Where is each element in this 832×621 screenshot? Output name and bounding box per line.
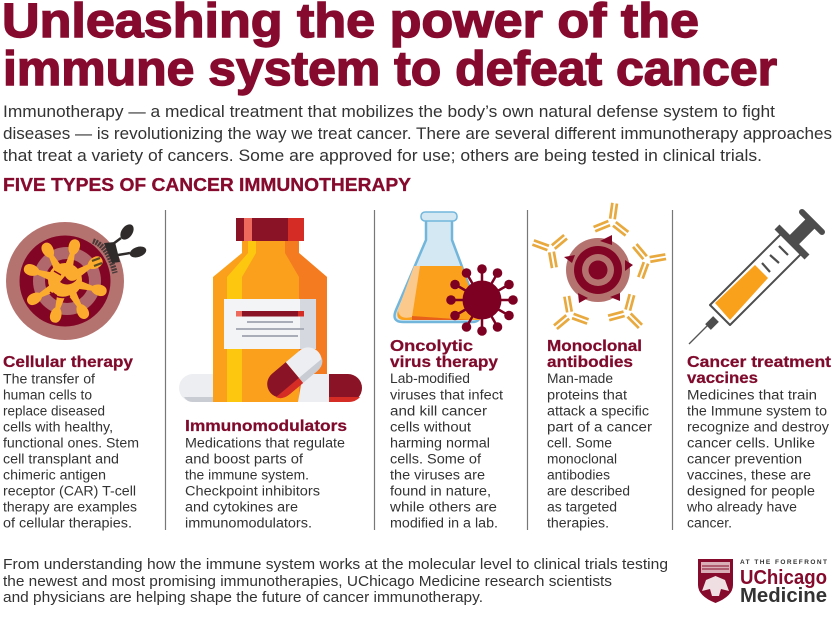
icon: pill bottle and capsules <box>179 218 362 403</box>
text: cellular therapy: therapy are examples <box>3 500 137 514</box>
text: oncolytic virus therapy: Lab-modified <box>390 371 470 386</box>
text: cellular therapy: receptor (CAR) T-cell <box>3 484 136 498</box>
heading: oncolytic virus therapy <box>390 338 498 371</box>
text: cellular therapy: replace diseased <box>3 404 105 418</box>
text: oncolytic virus therapy: while others are <box>389 500 497 514</box>
text: cancer treatment vaccines: recognize and destroy <box>687 420 829 434</box>
text: monoclonal antibodies: proteins that <box>547 388 627 402</box>
text: cancer treatment vaccines: designed for people <box>687 484 815 498</box>
text: oncolytic virus therapy: modified in a lab. <box>390 516 498 530</box>
text: cancer treatment vaccines: Medicines that train <box>687 388 817 402</box>
heading: monoclonal antibodies: antibodies <box>547 354 633 371</box>
logo: UChicago Medicine: AT THE FOREFRONT <box>740 559 827 566</box>
text: oncolytic virus therapy: found in nature, <box>390 484 491 498</box>
panel: immunomodulators <box>179 218 362 530</box>
text: monoclonal antibodies: therapies. <box>547 516 609 530</box>
text: cellular therapy: human cells to <box>3 388 92 402</box>
text: monoclonal antibodies: part of a cancer <box>547 420 653 434</box>
heading: monoclonal antibodies <box>547 338 642 371</box>
panel: cancer treatment vaccines <box>686 212 832 530</box>
title <box>2 0 777 96</box>
footer text: and physicians are helping shape the future of cancer immunotherapy. <box>3 589 483 606</box>
heading: oncolytic virus therapy: Oncolytic <box>390 338 473 355</box>
text: monoclonal antibodies: Man-made <box>547 371 613 386</box>
footer text <box>3 556 668 606</box>
text: monoclonal antibodies <box>547 371 653 530</box>
heading: monoclonal antibodies: Monoclonal <box>547 338 642 355</box>
logo: UChicago Medicine: Medicine <box>740 585 827 607</box>
section heading: FIVE TYPES OF CANCER IMMUNOTHERAPY <box>3 175 411 195</box>
panel: oncolytic virus therapy <box>389 212 518 530</box>
text: cellular therapy: functional ones. Stem <box>3 436 139 450</box>
heading: cancer treatment vaccines <box>687 354 832 387</box>
text: cellular therapy: cell transplant and <box>3 452 119 466</box>
footer text: From understanding how the immune system works at the molecular level to clinical trials testing <box>3 556 668 573</box>
intro paragraph <box>3 103 832 165</box>
icon: T-cell attacking cancer cell <box>6 222 148 340</box>
heading: cancer treatment vaccines: Cancer treatment <box>687 354 832 371</box>
text: oncolytic virus therapy: viruses that infect <box>390 388 503 402</box>
panel: monoclonal antibodies <box>532 201 669 530</box>
text: immunomodulators: immunomodulators. <box>185 516 312 530</box>
text: immunomodulators: and boost parts of <box>185 452 303 466</box>
icon: antibodies around target cell <box>532 201 669 329</box>
text: immunomodulators: Checkpoint inhibitors <box>185 484 320 498</box>
text: monoclonal antibodies: as targeted <box>547 500 617 514</box>
icon: flask with virus <box>395 212 518 336</box>
text: cancer treatment vaccines: cancer. <box>687 516 732 530</box>
text: cancer treatment vaccines: who already have <box>686 500 797 514</box>
text: cancer treatment vaccines: the Immune system to <box>687 404 827 418</box>
text: oncolytic virus therapy: and kill cancer <box>390 404 488 418</box>
text: cellular therapy: of cellular therapies. <box>3 516 132 530</box>
text: oncolytic virus therapy: the viruses are <box>390 468 485 482</box>
icon: virus <box>446 264 518 336</box>
text: cellular therapy: chimeric antigen <box>3 468 106 482</box>
heading: cancer treatment vaccines: vaccines <box>687 370 758 387</box>
text: cellular therapy: cells with healthy, <box>3 420 113 434</box>
text: cancer treatment vaccines: vaccines, these are <box>687 468 811 482</box>
text: cancer treatment vaccines: cancer prevention <box>687 452 802 466</box>
text: cancer treatment vaccines <box>686 388 829 530</box>
intro paragraph: Immunotherapy — a medical treatment that mobilizes the body’s own natural defense system to fight <box>3 103 775 121</box>
intro paragraph: that treat a variety of cancers. Some are approved for use; others are being tested in clinical trials. <box>3 147 762 165</box>
text: oncolytic virus therapy <box>389 371 503 530</box>
logo: UChicago Medicine <box>698 559 827 607</box>
intro paragraph: diseases — is revolutionizing the way we treat cancer. There are several different immunotherapy approaches <box>3 125 832 143</box>
text: oncolytic virus therapy: harming normal <box>390 436 490 450</box>
text: monoclonal antibodies: cell. Some <box>547 436 612 450</box>
text: immunomodulators: and cytokines are <box>185 500 298 514</box>
text: monoclonal antibodies: are described <box>547 484 630 498</box>
logo: UChicago Medicine: UChicago <box>740 567 827 589</box>
text: cellular therapy: The transfer of <box>3 372 95 386</box>
text: immunomodulators <box>185 436 345 530</box>
panel: cellular therapy <box>3 222 148 530</box>
heading: cellular therapy: Cellular therapy <box>3 354 133 371</box>
text: oncolytic virus therapy: cells. Some of <box>390 452 481 466</box>
heading: oncolytic virus therapy: virus therapy <box>390 354 498 371</box>
text: monoclonal antibodies: monoclonal <box>547 452 617 466</box>
footer text: the newest and most promising immunotherapies, UChicago Medicine research scientists <box>3 573 612 590</box>
title: immune system to defeat cancer <box>3 43 777 96</box>
text: monoclonal antibodies: attack a specific <box>547 404 649 418</box>
icon: syringe <box>689 212 822 344</box>
icon: shield <box>698 559 733 603</box>
text: monoclonal antibodies: antibodies <box>547 468 610 482</box>
text: immunomodulators: the immune system. <box>185 468 309 482</box>
text: oncolytic virus therapy: cells without <box>390 420 471 434</box>
text: cancer treatment vaccines: cancer cells. Unlike <box>687 436 815 450</box>
heading: immunomodulators: Immunomodulators <box>185 418 347 435</box>
text: cellular therapy <box>3 372 139 530</box>
text: immunomodulators: Medications that regulate <box>185 436 345 450</box>
